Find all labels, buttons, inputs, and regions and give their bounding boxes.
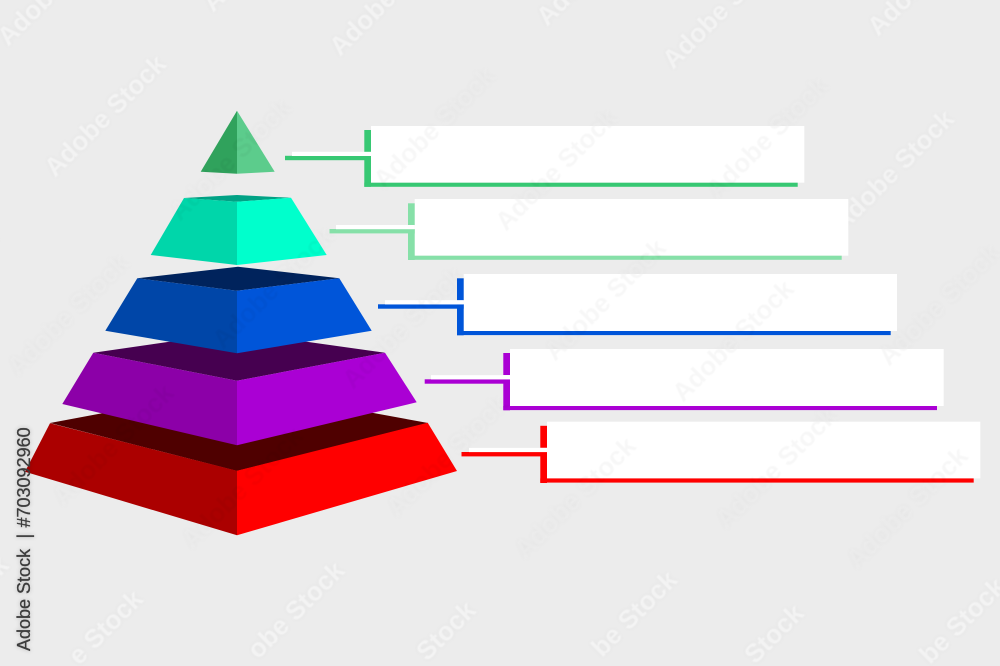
watermark layer over shapes: Adobe Stock	[46, 377, 180, 511]
watermark layer over shapes: Adobe Stock	[666, 273, 800, 407]
watermark layer on background: Adobe Stock	[840, 440, 974, 574]
watermark layer on background: Adobe Stock	[206, 220, 340, 354]
watermark layer on background: Adobe Stock	[175, 420, 309, 554]
watermark layer on background: Adobe Stock	[666, 273, 800, 407]
watermark layer over shapes: Adobe Stock	[206, 220, 340, 354]
watermark layer over shapes: Adobe Stock	[367, 60, 501, 194]
watermark layer over shapes: Adobe Stock	[508, 430, 642, 564]
callout 2: light green	[330, 199, 848, 260]
bracket 4	[425, 353, 937, 410]
watermark layer over shapes: Adobe Stock	[840, 440, 974, 574]
white label box 2	[415, 199, 848, 256]
watermark layer on background: Adobe Stock	[336, 260, 470, 394]
watermark layer on background: Adobe Stock	[163, 92, 297, 226]
watermark layer on background: Adobe Stock	[508, 430, 642, 564]
watermark layer on background: Stock	[410, 595, 482, 666]
bracket 3	[378, 278, 891, 335]
watermark layer on background: obe Stock	[241, 555, 350, 664]
vertical stock id text: #703092960	[14, 427, 34, 528]
watermark layer on background: Adobe Stock	[380, 388, 514, 522]
watermark layer over shapes: Adobe Stock	[538, 232, 672, 366]
tier 3: blue	[105, 267, 372, 353]
watermark layer on background: Adobe Stock	[489, 102, 623, 236]
watermark layer on background: Adobe Stock	[1, 247, 135, 381]
white label box 3	[464, 274, 897, 331]
watermark layer on background: be Stock	[585, 564, 683, 662]
watermark layer on background: Adobe Stock	[538, 232, 672, 366]
bracket 1	[285, 130, 798, 187]
watermark layer on background: Adobe Stock	[700, 70, 834, 204]
callout 1: green	[285, 126, 804, 187]
watermark layer on background: Adobe Stock	[38, 48, 172, 182]
bracket 5	[462, 426, 974, 483]
watermark layer over shapes: Adobe Stock	[709, 400, 843, 534]
white label box 1	[371, 126, 804, 183]
tier 5: red base	[25, 388, 457, 535]
tier 2: teal	[151, 195, 327, 265]
watermark layer on background: Adobe Stock	[826, 103, 960, 237]
tier 4: purple	[62, 332, 417, 445]
bracket 2	[330, 203, 842, 260]
watermark layer over shapes: Adobe Stock	[489, 102, 623, 236]
white label box 4	[510, 349, 944, 406]
watermark layer on background: Adobe Stock	[46, 377, 180, 511]
tier 1: green apex	[201, 111, 275, 174]
watermark layer over shapes: Adobe Stock	[1, 247, 135, 381]
watermark layer over shapes: Adobe Stock	[336, 260, 470, 394]
callout 4: purple	[425, 349, 944, 410]
watermark layer over shapes: Adobe Stock	[380, 388, 514, 522]
watermark layer on background: Adobe Stock	[367, 60, 501, 194]
watermark layer over shapes	[1, 60, 1000, 574]
vertical stock id text: Adobe Stock	[14, 548, 34, 651]
watermark layer over shapes: Adobe Stock	[700, 70, 834, 204]
watermark layer over shapes: Adobe Stock	[163, 92, 297, 226]
callout 5: red	[462, 422, 980, 483]
watermark layer on background: Adobe Stock	[709, 400, 843, 534]
pyramid	[25, 111, 457, 535]
watermark layer over shapes: Adobe Stock	[175, 420, 309, 554]
white label box 5	[547, 422, 980, 478]
callout 3: blue	[378, 274, 897, 335]
vertical stock id text: |	[14, 534, 34, 538]
